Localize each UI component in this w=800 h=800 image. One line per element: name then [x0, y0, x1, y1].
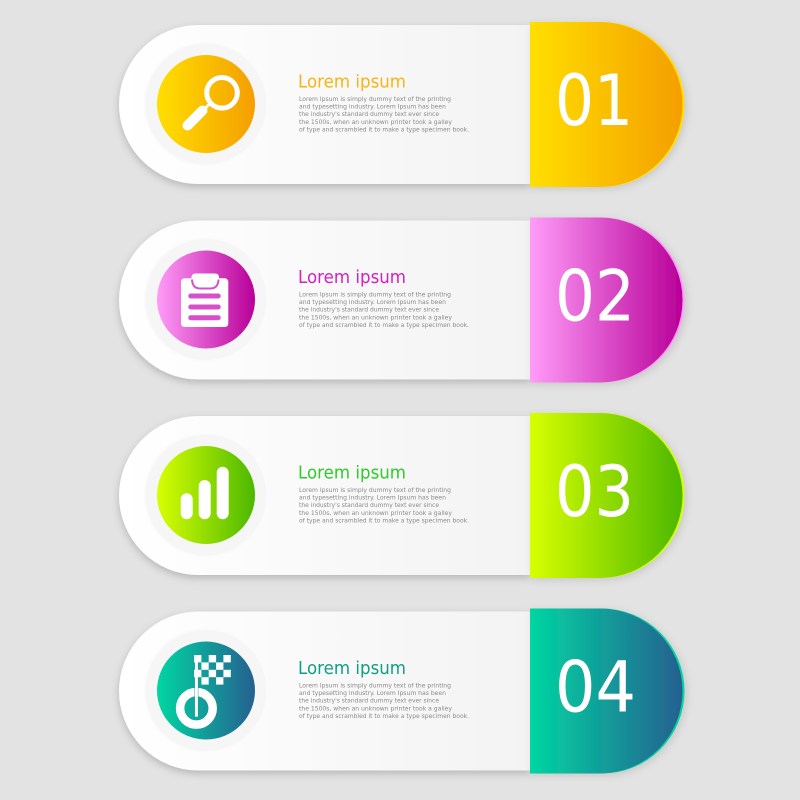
- description: of type and scrambled it to make a type specimen book.: [299, 712, 469, 720]
- description: the industry's standard dummy text ever since: [299, 697, 439, 705]
- description: the 1500s, when an unknown printer took a galley: [299, 118, 452, 126]
- step 02 panel: [119, 218, 684, 382]
- card body: [119, 612, 530, 770]
- number tab: [530, 413, 684, 578]
- number: 01: [555, 60, 633, 142]
- icon: clipboard: [181, 274, 228, 327]
- heading: Lorem ipsum: [298, 72, 406, 92]
- icon ring: [144, 42, 268, 166]
- description: Lorem Ipsum is simply dummy text of the printing: [299, 681, 451, 689]
- description: of type and scrambled it to make a type specimen book.: [299, 517, 469, 525]
- number: 04: [555, 647, 636, 729]
- description: the 1500s, when an unknown printer took a galley: [299, 704, 452, 712]
- description: [299, 681, 469, 720]
- number tab: [530, 218, 684, 382]
- icon disc: [157, 55, 255, 153]
- description: and typesetting industry. Lorem Ipsum has been: [299, 689, 446, 697]
- card body: [119, 220, 530, 380]
- step 01 panel: [119, 22, 684, 187]
- description: the 1500s, when an unknown printer took a galley: [299, 509, 452, 517]
- icon disc: [157, 446, 255, 544]
- description: and typesetting industry. Lorem Ipsum has been: [299, 494, 446, 502]
- heading: Lorem ipsum: [298, 658, 406, 679]
- icon ring: [144, 629, 268, 752]
- step 03 panel: [119, 413, 684, 578]
- description: [299, 95, 469, 134]
- description: the 1500s, when an unknown printer took a galley: [299, 313, 452, 321]
- number tab: [530, 608, 684, 774]
- description: [299, 290, 469, 329]
- description: [299, 486, 469, 525]
- description: Lorem Ipsum is simply dummy text of the printing: [299, 486, 451, 494]
- heading: Lorem ipsum: [298, 462, 406, 484]
- icon: checkered flag on target: [180, 655, 231, 725]
- description: the industry's standard dummy text ever since: [299, 110, 439, 118]
- icon ring: [144, 434, 268, 556]
- icon disc: [157, 642, 255, 740]
- heading: Lorem ipsum: [298, 267, 406, 288]
- description: of type and scrambled it to make a type specimen book.: [299, 321, 469, 329]
- card body: [119, 25, 530, 184]
- description: Lorem Ipsum is simply dummy text of the printing: [299, 290, 451, 298]
- description: the industry's standard dummy text ever since: [299, 306, 439, 314]
- description: and typesetting industry. Lorem Ipsum has been: [299, 102, 446, 110]
- description: and typesetting industry. Lorem Ipsum has been: [299, 298, 446, 306]
- description: the industry's standard dummy text ever since: [299, 501, 439, 509]
- number tab: [530, 22, 684, 187]
- icon: magnifying glass: [188, 78, 237, 126]
- step 04 panel: [119, 608, 684, 774]
- card body: [119, 416, 530, 575]
- icon disc: [157, 250, 255, 348]
- number: 03: [555, 451, 634, 533]
- description: of type and scrambled it to make a type specimen book.: [299, 126, 469, 134]
- icon: bar chart: [181, 467, 229, 519]
- icon ring: [144, 238, 268, 361]
- number: 02: [555, 256, 635, 338]
- description: Lorem Ipsum is simply dummy text of the printing: [299, 95, 451, 103]
